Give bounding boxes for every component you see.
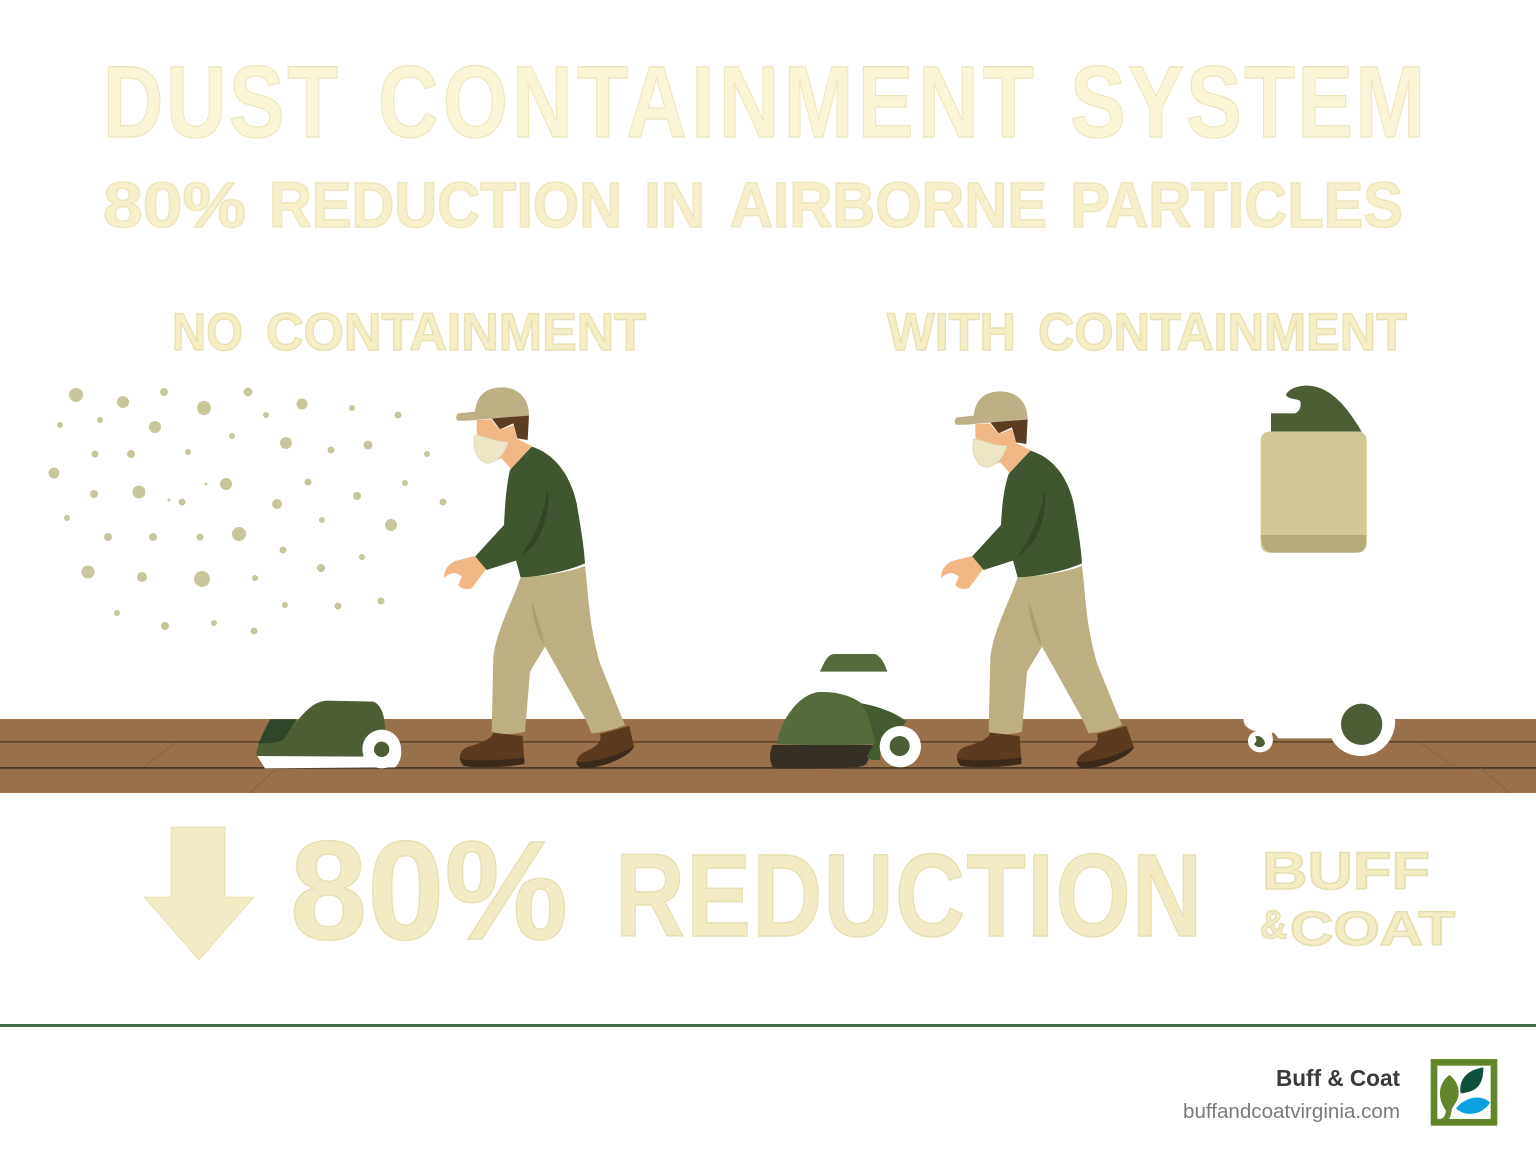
wordmark: buff and coat: COAT [1290,903,1455,956]
title: SYSTEM [1070,45,1425,159]
worker without containment [444,387,634,768]
footer brand name: Buff & Coat [1276,1065,1400,1091]
sander with containment [770,654,921,768]
title: CONTAINMENT [378,45,1034,159]
subtitle: REDUCTION [269,169,622,241]
title [103,45,1425,159]
footer url: buffandcoatvirginia.com [1183,1101,1400,1123]
heading: no containment: CONTAINMENT [266,303,646,362]
subtitle: 80% [103,169,246,241]
heading: no containment: NO [172,303,243,362]
heading: with containment: WITH [887,303,1016,362]
subtitle: AIRBORNE [730,169,1047,241]
wordmark: buff and coat: & [1260,903,1287,947]
footer logo [1434,1062,1494,1122]
big stat: 80%: 80% [290,811,568,969]
wordmark: buff and coat [1260,842,1455,956]
wordmark: buff and coat: BUFF [1262,842,1430,901]
sander without containment [257,701,401,768]
worker with containment [941,391,1134,768]
heading: with containment: CONTAINMENT [1038,303,1407,362]
title: DUST [103,45,338,159]
heading: with containment [887,303,1407,362]
subtitle: PARTICLES [1070,169,1403,241]
wood floor [0,719,1536,793]
subtitle [103,169,1403,241]
vacuum wheels on floor [1243,702,1395,756]
subtitle: IN [644,169,705,241]
down arrow [144,827,254,960]
dust collection vacuum bag [1261,386,1367,553]
big stat label: reduction: REDUCTION [615,829,1202,961]
dust particle cloud [48,388,446,634]
